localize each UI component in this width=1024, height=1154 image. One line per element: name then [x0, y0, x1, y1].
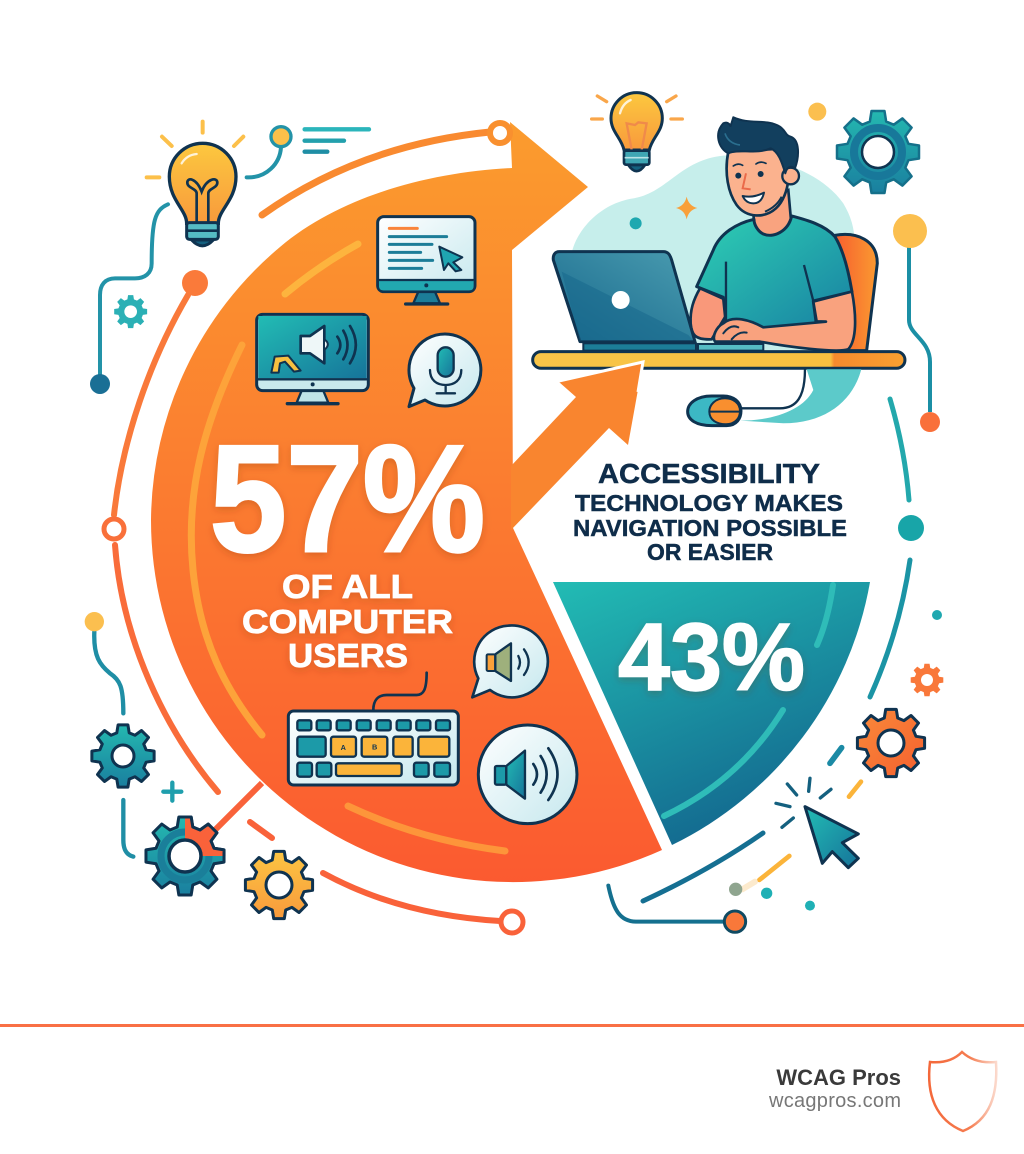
- outer teal arcs right: [643, 399, 910, 901]
- teal swoosh below desk: [740, 369, 861, 423]
- hair: [718, 117, 798, 173]
- inner arcs on orange segment: [191, 244, 505, 851]
- teal ball right: [898, 515, 924, 541]
- orange ring left: [104, 519, 124, 539]
- sparkle and dots: [676, 197, 697, 219]
- person at laptop: [533, 103, 905, 426]
- keyboard with cable: B: [372, 742, 377, 751]
- top lightbulb: [592, 93, 682, 171]
- bottom-right confetti and node: [608, 856, 815, 932]
- yellow gear: [245, 851, 313, 919]
- teal gear lower left: [92, 725, 154, 787]
- 57% statistic: COMPUTER: [242, 603, 453, 640]
- mouse: [688, 396, 741, 426]
- 57% statistic: [210, 414, 485, 674]
- chair: [835, 234, 877, 351]
- microphone speech bubble: [409, 334, 481, 407]
- orange pie segment 57% with arrow head: [151, 122, 662, 882]
- 57% statistic: 57%: [210, 414, 485, 584]
- laptop: [553, 252, 695, 342]
- title text block: ACCESSIBILITY: [598, 458, 820, 489]
- title text block: [573, 458, 847, 565]
- diagonal orange arrow: [511, 362, 643, 530]
- small orange gear right: [911, 664, 943, 696]
- large teal gear top right: [837, 111, 919, 193]
- neck: [753, 190, 792, 237]
- face: [735, 173, 741, 179]
- 43% statistic: 43%: [618, 604, 805, 711]
- monitor with speaker: [257, 314, 368, 404]
- outer orange arcs: [114, 132, 500, 921]
- teal dot right: [932, 610, 942, 620]
- head: [727, 148, 788, 215]
- orange gear right: [857, 709, 925, 777]
- background blob: [572, 155, 855, 350]
- keyboard with cable: [288, 673, 458, 785]
- monitor with text and cursor: [378, 217, 475, 304]
- orange ring bottom: [501, 911, 523, 933]
- right arm and hand: [714, 292, 855, 351]
- footer shield logo: [929, 1052, 996, 1131]
- click cursor with dashes: [776, 748, 861, 868]
- desk: [533, 352, 905, 368]
- 57% statistic: USERS: [288, 637, 408, 674]
- footer brand name: WCAG Pros: [776, 1065, 901, 1090]
- left arm: [691, 288, 733, 339]
- large teal and orange gear: [146, 817, 224, 895]
- footer website: wcagpros.com: [768, 1090, 901, 1112]
- speaker speech bubble: [472, 625, 548, 697]
- orange node top: [490, 123, 510, 143]
- title text block: OR EASIER: [647, 539, 773, 565]
- right circuit with nodes: [893, 214, 940, 432]
- inner arcs on teal segment: [664, 585, 833, 816]
- left circuit lines and small gear: [90, 127, 369, 394]
- orange ball: [182, 270, 208, 296]
- teal pie segment 43%: [553, 582, 870, 845]
- shirt: [697, 216, 852, 330]
- 57% statistic: OF ALL: [282, 568, 413, 605]
- footer divider: [0, 1024, 1024, 1027]
- title text block: TECHNOLOGY MAKES: [575, 490, 843, 516]
- keyboard with cable: A: [341, 743, 347, 752]
- left lightbulb: [147, 122, 243, 246]
- mouse cable: [740, 369, 805, 408]
- title text block: NAVIGATION POSSIBLE: [573, 515, 847, 541]
- lower-left circuit with yellow node: [85, 612, 181, 857]
- large speaker circle: [478, 725, 577, 824]
